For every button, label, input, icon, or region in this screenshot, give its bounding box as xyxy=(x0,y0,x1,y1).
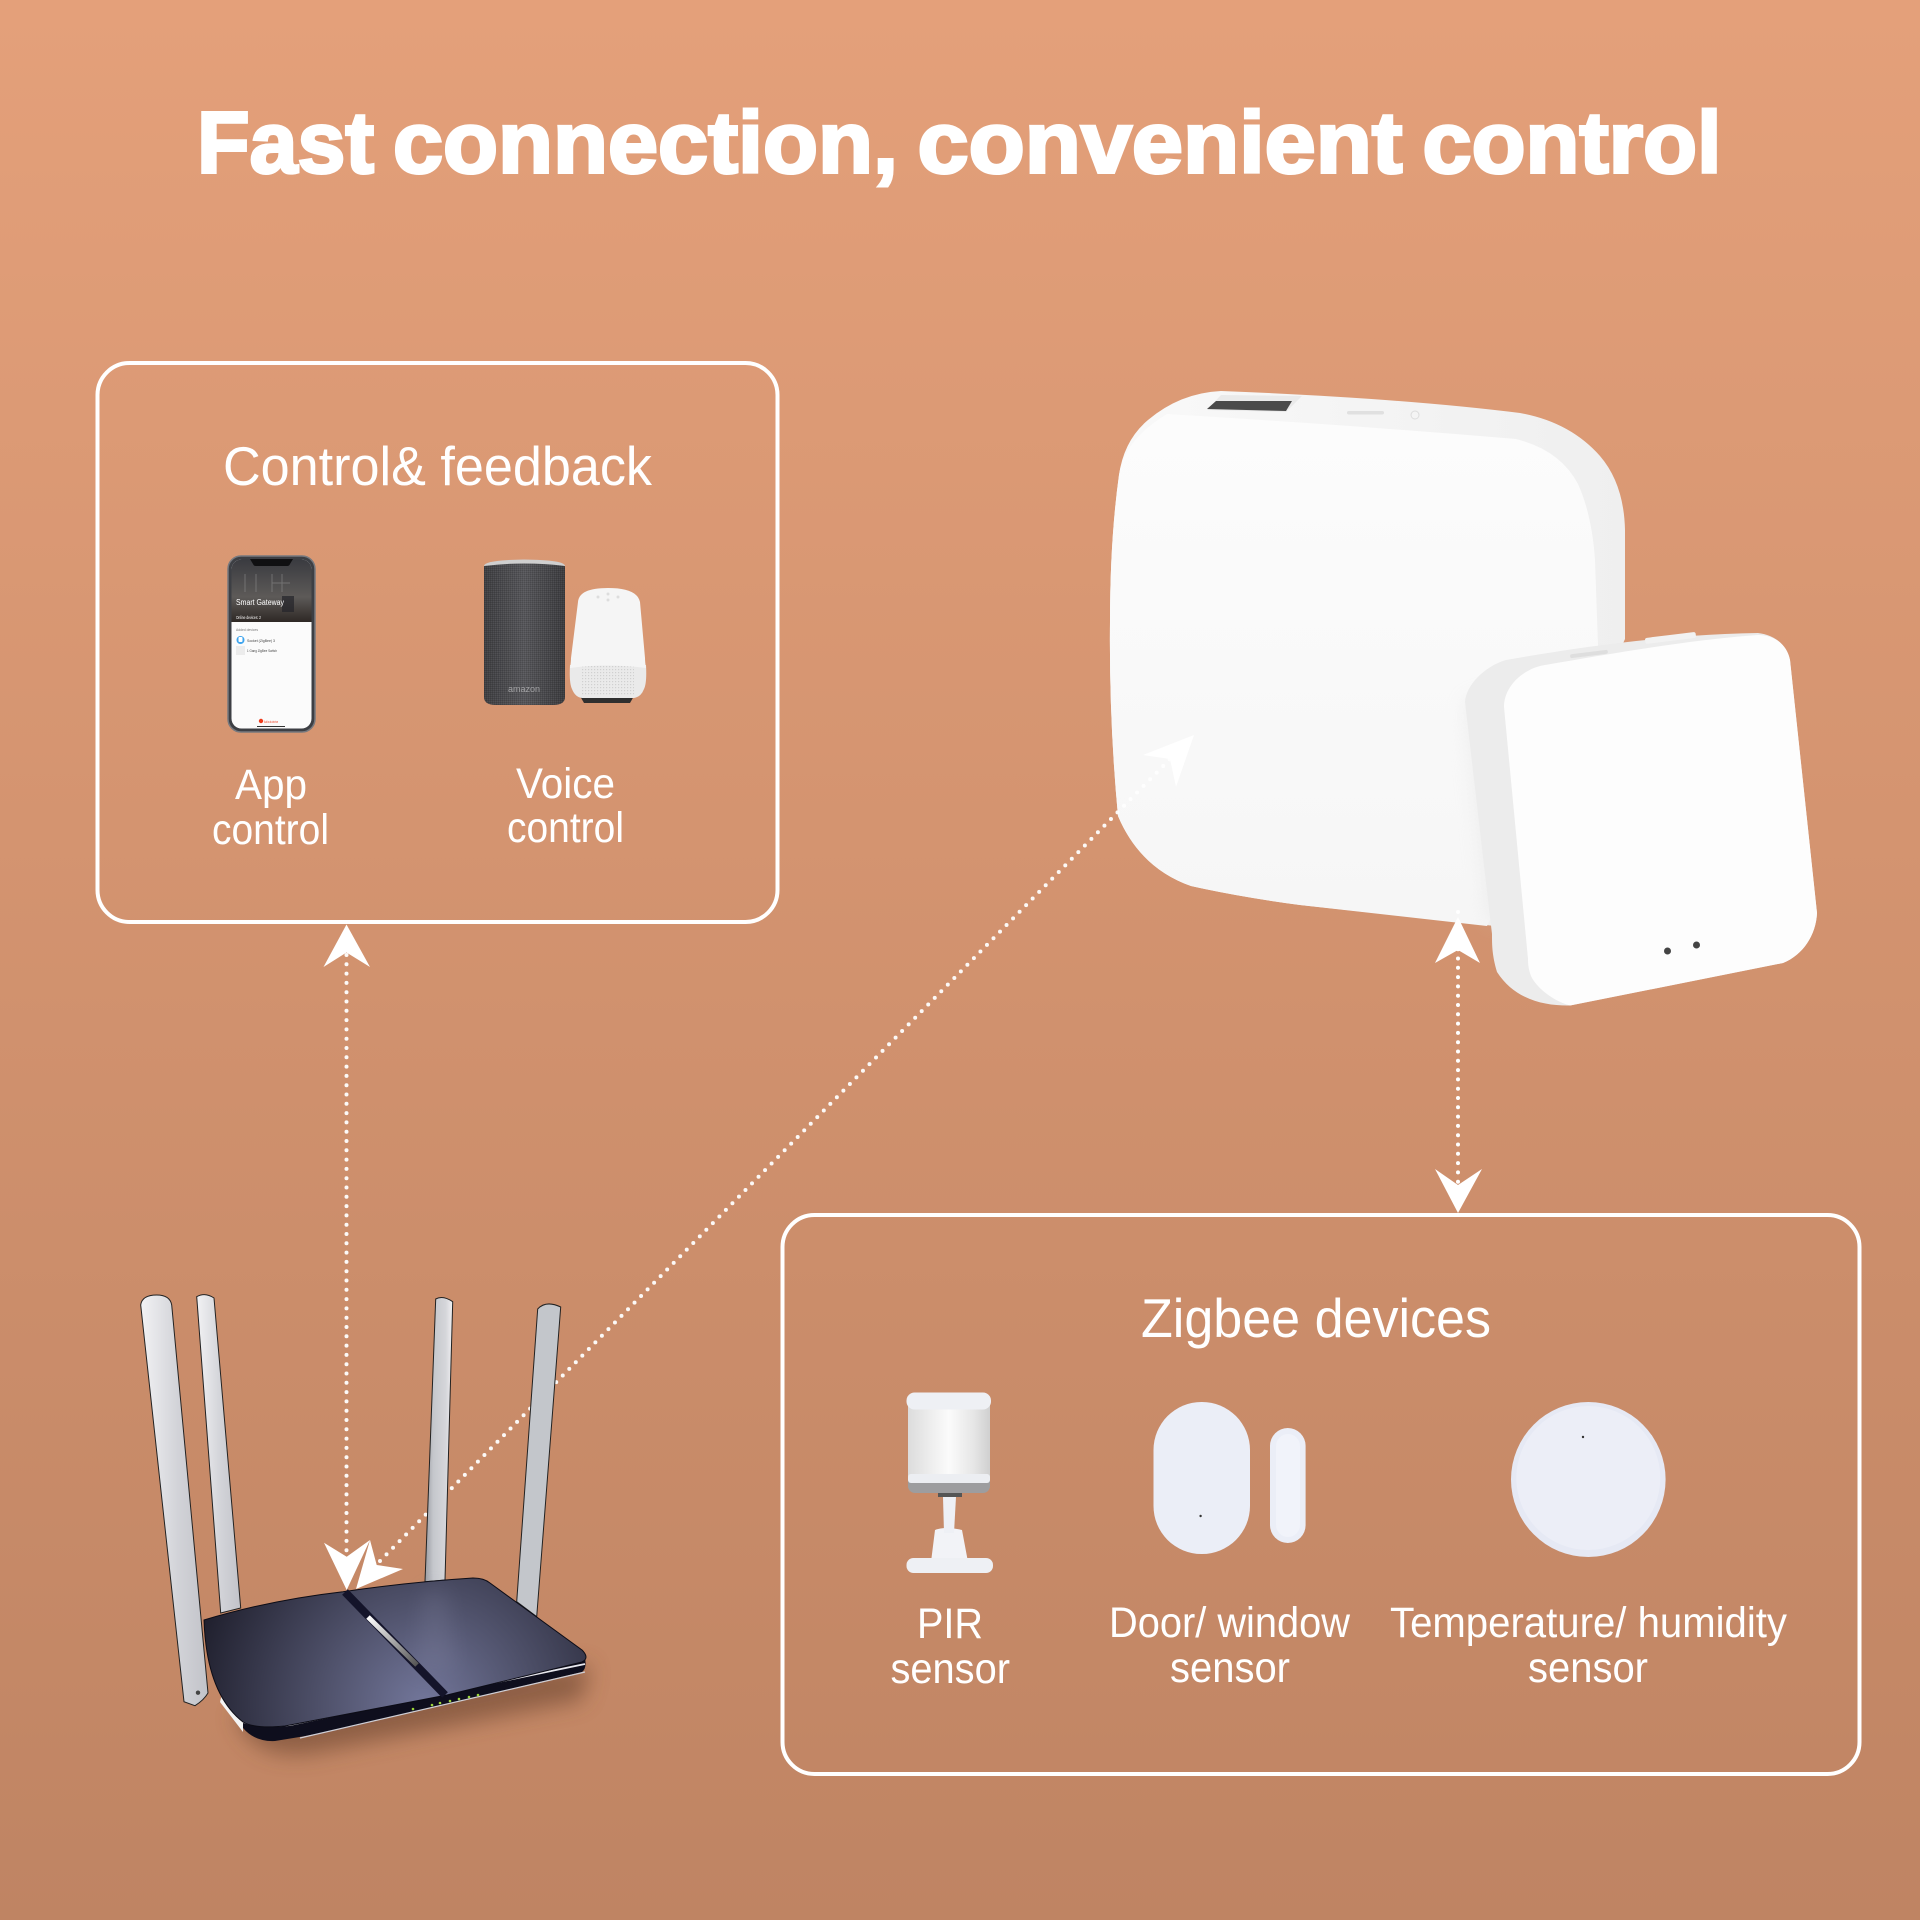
title: control xyxy=(1422,94,1722,192)
arrow: router to gateway xyxy=(356,735,1194,1589)
antenna back left xyxy=(197,1295,241,1613)
router shadow xyxy=(235,1665,590,1755)
title: connection, xyxy=(393,94,898,192)
label: temperature humidity sensor xyxy=(1390,1599,1787,1692)
shadow between gateways xyxy=(1465,660,1600,930)
panel: zigbee devices xyxy=(782,1215,1860,1774)
icon: phone with app: Add sub-device xyxy=(264,719,278,724)
icon: phone with app: 1 Gang ZigBee Switch xyxy=(247,648,277,653)
icon: phone with app: Socket (ZigBee) 3 xyxy=(247,638,276,643)
router top face xyxy=(204,1578,586,1727)
antenna front left xyxy=(141,1295,208,1706)
icon: phone with app xyxy=(228,556,315,732)
icon: pir sensor xyxy=(906,1392,993,1573)
icon: temperature humidity sensor xyxy=(1511,1402,1666,1557)
icon: phone with app: Online devices: 2 xyxy=(236,615,261,620)
icon: smart speakers: amazon xyxy=(508,684,540,694)
label: voice control: control xyxy=(507,804,624,852)
antenna reflection xyxy=(415,1590,456,1670)
label: app control xyxy=(212,761,329,854)
arrow: gateway to zigbee devices xyxy=(1435,912,1482,1213)
router base xyxy=(210,1640,586,1741)
antenna back middle xyxy=(425,1298,453,1582)
icon: small gateway xyxy=(1465,632,1817,1006)
antenna back right xyxy=(517,1304,561,1617)
label: door window sensor: Door/ window xyxy=(1109,1599,1351,1647)
arrow: router to control panel xyxy=(324,924,370,1590)
label: voice control xyxy=(507,760,624,852)
icon: phone with app: Added devices xyxy=(236,627,258,632)
heading: control and feedback: Control& feedback xyxy=(223,435,652,497)
label: voice control: Voice xyxy=(516,760,615,808)
icon: router xyxy=(141,1295,590,1755)
icon: large gateway xyxy=(1110,391,1625,926)
label: pir sensor: sensor xyxy=(890,1645,1010,1693)
usb port xyxy=(1207,395,1302,412)
label: app control: control xyxy=(212,806,329,854)
heading: zigbee devices: Zigbee devices xyxy=(1141,1287,1491,1349)
icon: door window sensor xyxy=(1154,1402,1306,1554)
status leds xyxy=(412,1694,479,1710)
icon: phone with app: Smart Gateway xyxy=(236,598,284,607)
title: convenient xyxy=(918,94,1402,192)
icon: smart speakers xyxy=(484,560,646,705)
label: app control: App xyxy=(235,761,307,809)
label: door window sensor: sensor xyxy=(1170,1644,1290,1692)
center stripe xyxy=(345,1592,445,1695)
label: pir sensor xyxy=(890,1600,1010,1693)
label: temperature humidity sensor: Temperature/ humidity xyxy=(1390,1599,1787,1647)
title: Fast xyxy=(197,94,374,192)
panel: control and feedback xyxy=(98,363,778,922)
label: temperature humidity sensor: sensor xyxy=(1528,1644,1648,1692)
label: door window sensor xyxy=(1109,1599,1351,1692)
label: pir sensor: PIR xyxy=(917,1600,983,1648)
